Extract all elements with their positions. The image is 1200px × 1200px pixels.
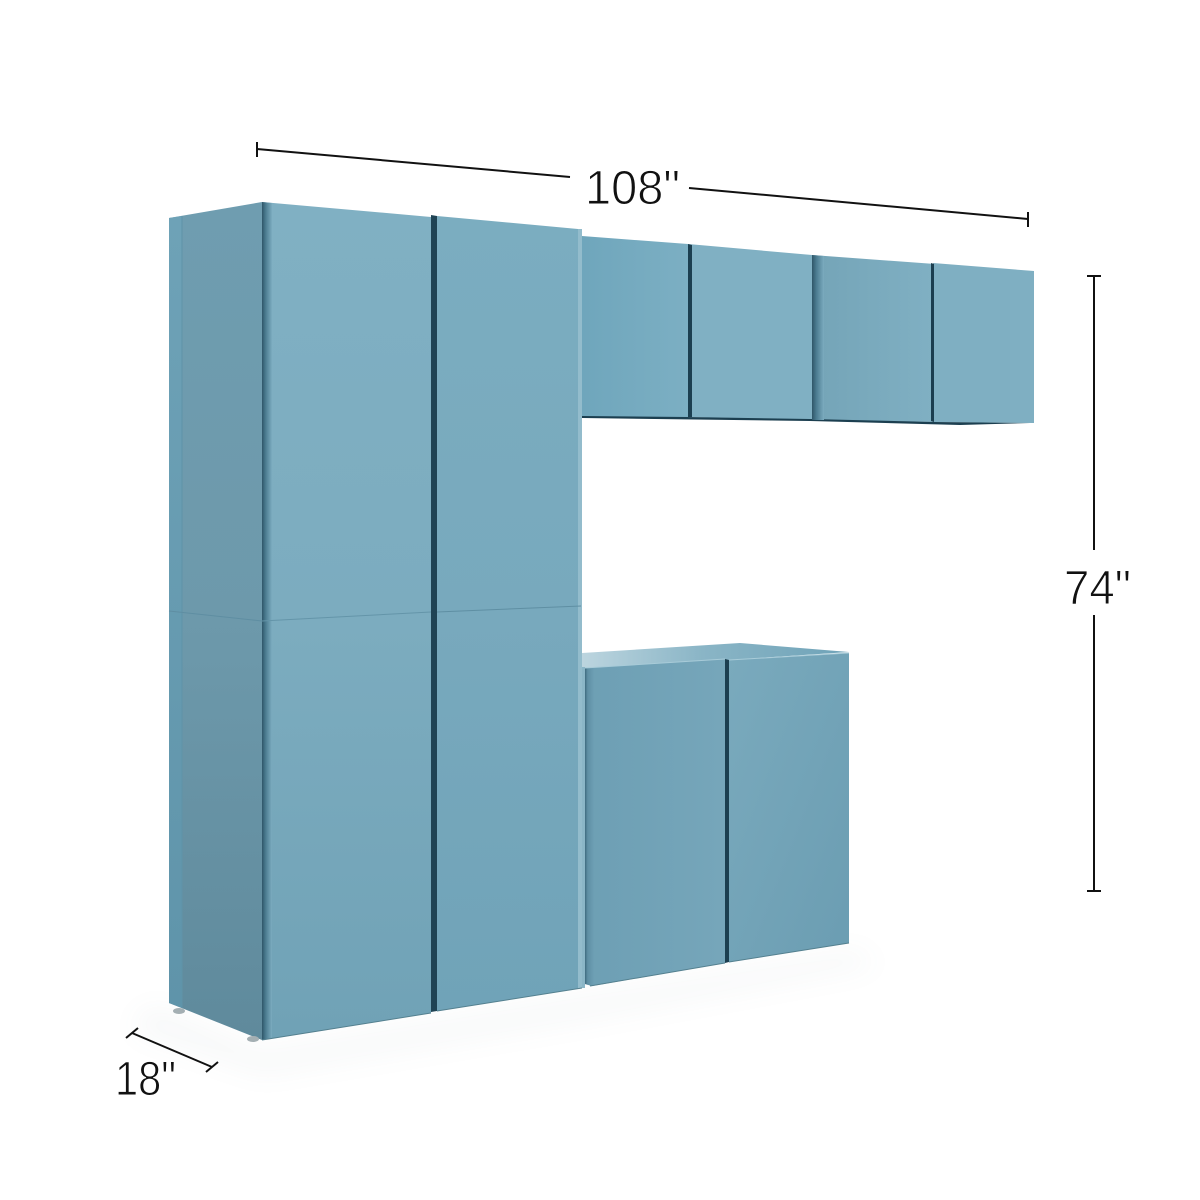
- door gap: [431, 215, 437, 1012]
- base door right: [729, 653, 849, 962]
- wall door gaps and underside: [582, 244, 1030, 425]
- wall door 1: [582, 236, 688, 417]
- wall cabinets: [582, 236, 1034, 425]
- base door gap: [725, 659, 729, 963]
- side panel: [169, 202, 262, 1040]
- label: 18 inches: 18": [115, 1053, 176, 1106]
- dimension: depth: [115, 1028, 218, 1106]
- dimension: width: [257, 142, 1028, 227]
- tall cabinet tower: [169, 202, 582, 1042]
- wall door 2: [688, 244, 812, 420]
- tall door left: [262, 202, 431, 1040]
- label: 74 inches: 74": [1064, 562, 1131, 615]
- rounded door edge: [812, 255, 824, 420]
- tall door right: [437, 216, 582, 1011]
- base cabinets: [582, 643, 849, 988]
- wall door 4: [933, 263, 1034, 423]
- label: 108 inches: 108": [585, 162, 680, 215]
- floor shadow: [130, 950, 880, 1075]
- wall door 3: [812, 255, 935, 422]
- base door left: [582, 659, 725, 988]
- counter top: [582, 643, 849, 668]
- leveling feet: [173, 1008, 259, 1042]
